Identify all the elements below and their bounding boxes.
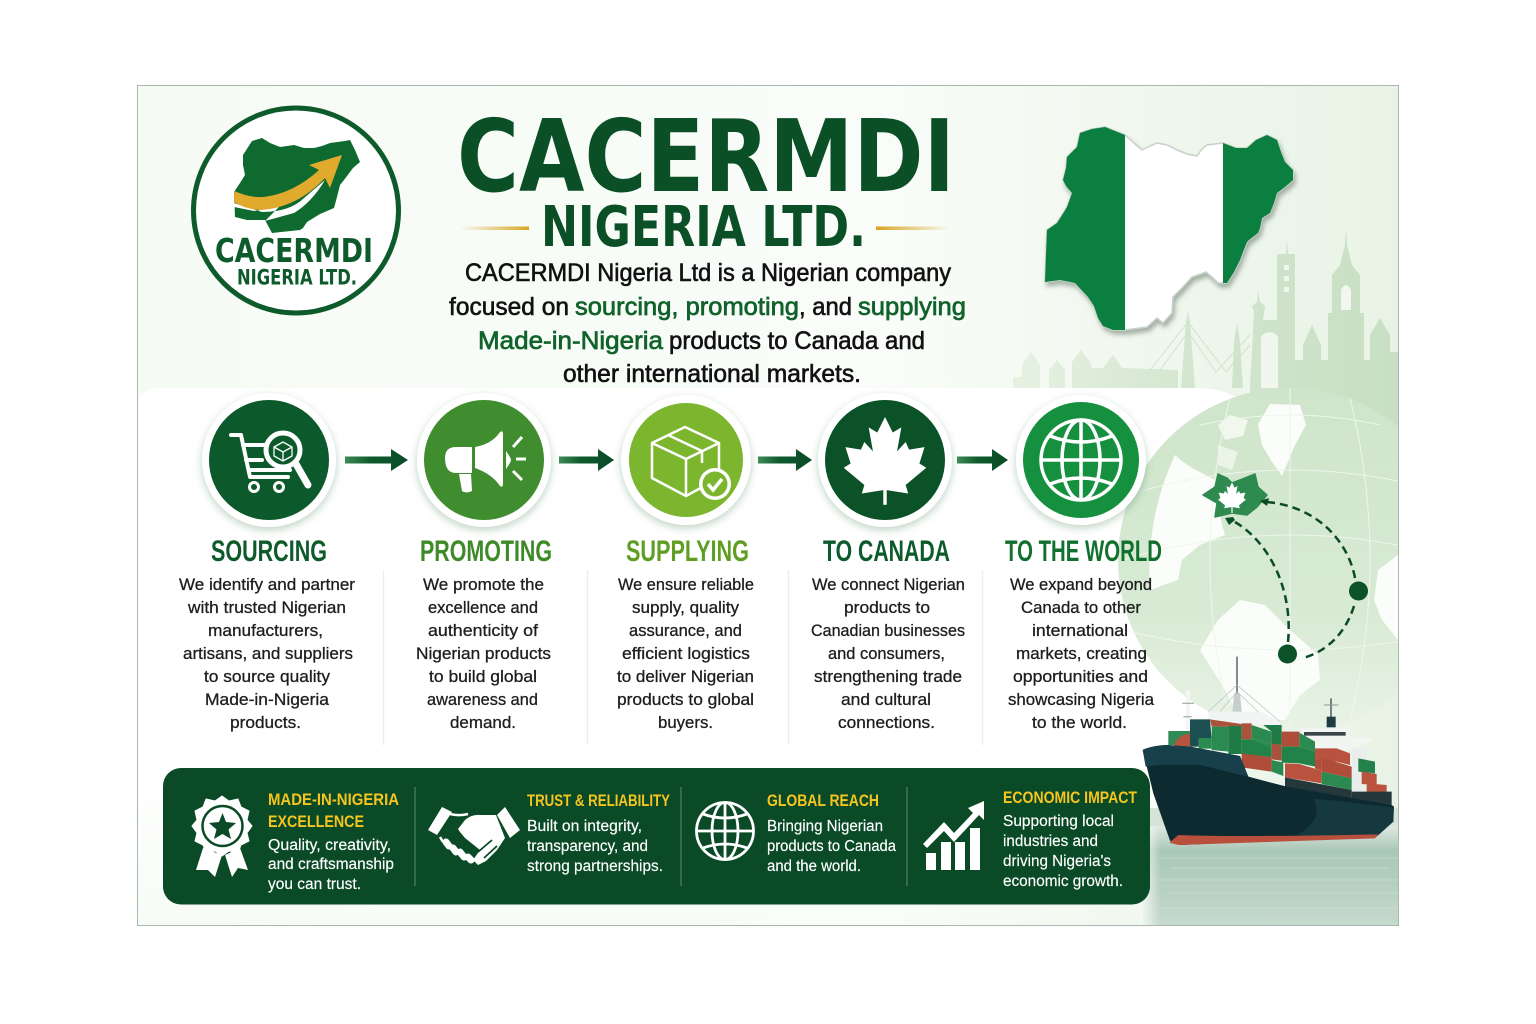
arrow [758,449,812,471]
description: to the world. [1032,713,1127,732]
skyline silhouette [1013,228,1398,430]
globe [1118,388,1398,720]
icon: handshake [428,807,520,865]
logo wordmark: NIGERIA LTD. [237,266,357,290]
description: products to global [617,690,754,709]
description: supply, quality [632,598,739,617]
heading: TO CANADA [823,535,950,568]
map routes [1203,474,1368,664]
step: supplying [617,395,754,732]
title [457,98,955,260]
description: with trusted Nigerian [187,598,346,617]
intro text: products to Canada and [669,327,925,355]
icon: box with check [621,395,751,525]
icon: megaphone [417,393,551,527]
description: excellence and [428,598,538,617]
benefit: trust and reliability: Built on integrity, [527,818,642,835]
description: We ensure reliable [618,575,754,594]
description: manufacturers, [208,621,323,640]
benefit: made-in-nigeria excellence [192,790,399,893]
benefit: economic impact: industries and [1003,833,1098,850]
benefit: trust and reliability [428,791,671,875]
intro text: other international markets. [563,360,861,388]
benefit: made-in-nigeria excellence: EXCELLENCE [268,812,364,831]
step: promoting [416,393,552,732]
description: to source quality [204,667,331,686]
benefit: global reach: products to Canada [767,838,896,855]
description: We promote the [423,575,544,594]
step: to canada [811,393,965,732]
description: buyers. [658,713,713,732]
water [1140,808,1398,925]
logo map [234,138,360,233]
heading: SUPPLYING [626,535,749,568]
arch cut-out and windows [1261,265,1351,388]
benefit: economic impact: economic growth. [1003,873,1123,890]
description: opportunities and [1013,667,1148,686]
description: artisans, and suppliers [183,644,353,663]
dashed route lines [1235,502,1355,658]
description: awareness and [427,690,538,709]
step: to the world [1005,395,1162,732]
title: CACERMDI [457,98,955,215]
arrow [345,449,408,471]
description: Made-in-Nigeria [205,690,330,709]
logo wordmark: CACERMDI [215,231,373,270]
description: and consumers, [828,644,945,663]
description: efficient logistics [622,644,750,663]
description: strengthening trade [814,667,962,686]
benefit: made-in-nigeria excellence: MADE-IN-NIGERIA [268,790,399,809]
icon: maple leaf [818,393,952,527]
benefit: trust and reliability: TRUST & RELIABILITY [527,791,671,810]
arrow [559,449,614,471]
background panel [138,86,1398,926]
intro text: CACERMDI Nigeria Ltd is a Nigerian company [465,259,951,287]
description [617,575,754,732]
benefit: made-in-nigeria excellence: you can trust. [268,876,361,893]
flag map of Nigeria [1040,120,1298,335]
arrow [957,449,1008,471]
description: products. [230,713,301,732]
container ship [1143,657,1394,845]
white content panel [138,388,1240,808]
benefit: made-in-nigeria excellence: Quality, creativity, [268,837,391,854]
route dots [1278,582,1368,664]
intro text: Made-in-Nigeria [478,327,663,355]
canada marker [1203,474,1267,525]
description: authenticity of [428,621,538,640]
intro text: focused on [449,293,569,321]
benefit: global reach: and the world. [767,858,861,875]
description: assurance, and [629,621,742,640]
description: to build global [429,667,537,686]
description [1008,575,1155,732]
icon: globe [696,802,754,860]
benefit: economic impact [923,788,1138,890]
description: showcasing Nigeria [1008,690,1155,709]
benefits bar [163,768,1150,904]
icon: globe [1016,395,1146,525]
icon: cart with magnifier [202,393,336,527]
description: markets, creating [1016,644,1147,663]
heading: PROMOTING [420,535,552,568]
description: connections. [838,713,935,732]
benefit: trust and reliability: strong partnerships. [527,858,663,875]
description [179,575,355,732]
intro text: sourcing, promoting [575,293,799,321]
hull [1143,745,1394,845]
benefit: economic impact: driving Nigeria's [1003,853,1111,870]
benefit: economic impact: Supporting local [1003,813,1114,830]
description: We identify and partner [179,575,355,594]
description: products to [844,598,930,617]
heading: TO THE WORLD [1005,535,1162,568]
intro text [449,259,966,388]
intro text: , and [799,293,852,321]
subtitle: NIGERIA LTD. [541,195,866,260]
benefit: global reach: Bringing Nigerian [767,818,883,835]
logo swoosh [234,155,342,221]
description: We expand beyond [1010,575,1152,594]
description [416,575,551,732]
masts and bridge [1182,656,1374,760]
globe continents [1149,404,1398,720]
description: international [1032,621,1128,640]
description: Nigerian products [416,644,551,663]
benefit: global reach [696,791,896,875]
description: demand. [450,713,516,732]
column dividers [384,570,982,745]
description: We connect Nigerian [812,575,965,594]
heading: SOURCING [211,535,327,568]
icon: rosette [192,796,252,877]
logo [194,108,398,313]
description: Canada to other [1021,598,1141,617]
containers [1168,719,1392,805]
benefit: made-in-nigeria excellence: and craftsmanship [268,856,394,873]
logo wordmark [215,231,373,290]
benefit: economic impact: ECONOMIC IMPACT [1003,788,1138,807]
benefit: global reach: GLOBAL REACH [767,791,879,810]
description: and cultural [841,690,931,709]
benefit: trust and reliability: transparency, and [527,838,648,855]
description [811,575,965,732]
icon: growth chart [923,801,984,870]
step: sourcing [179,393,355,732]
description: to deliver Nigerian [617,667,754,686]
intro text: supplying [858,293,966,321]
description: Canadian businesses [811,621,965,640]
